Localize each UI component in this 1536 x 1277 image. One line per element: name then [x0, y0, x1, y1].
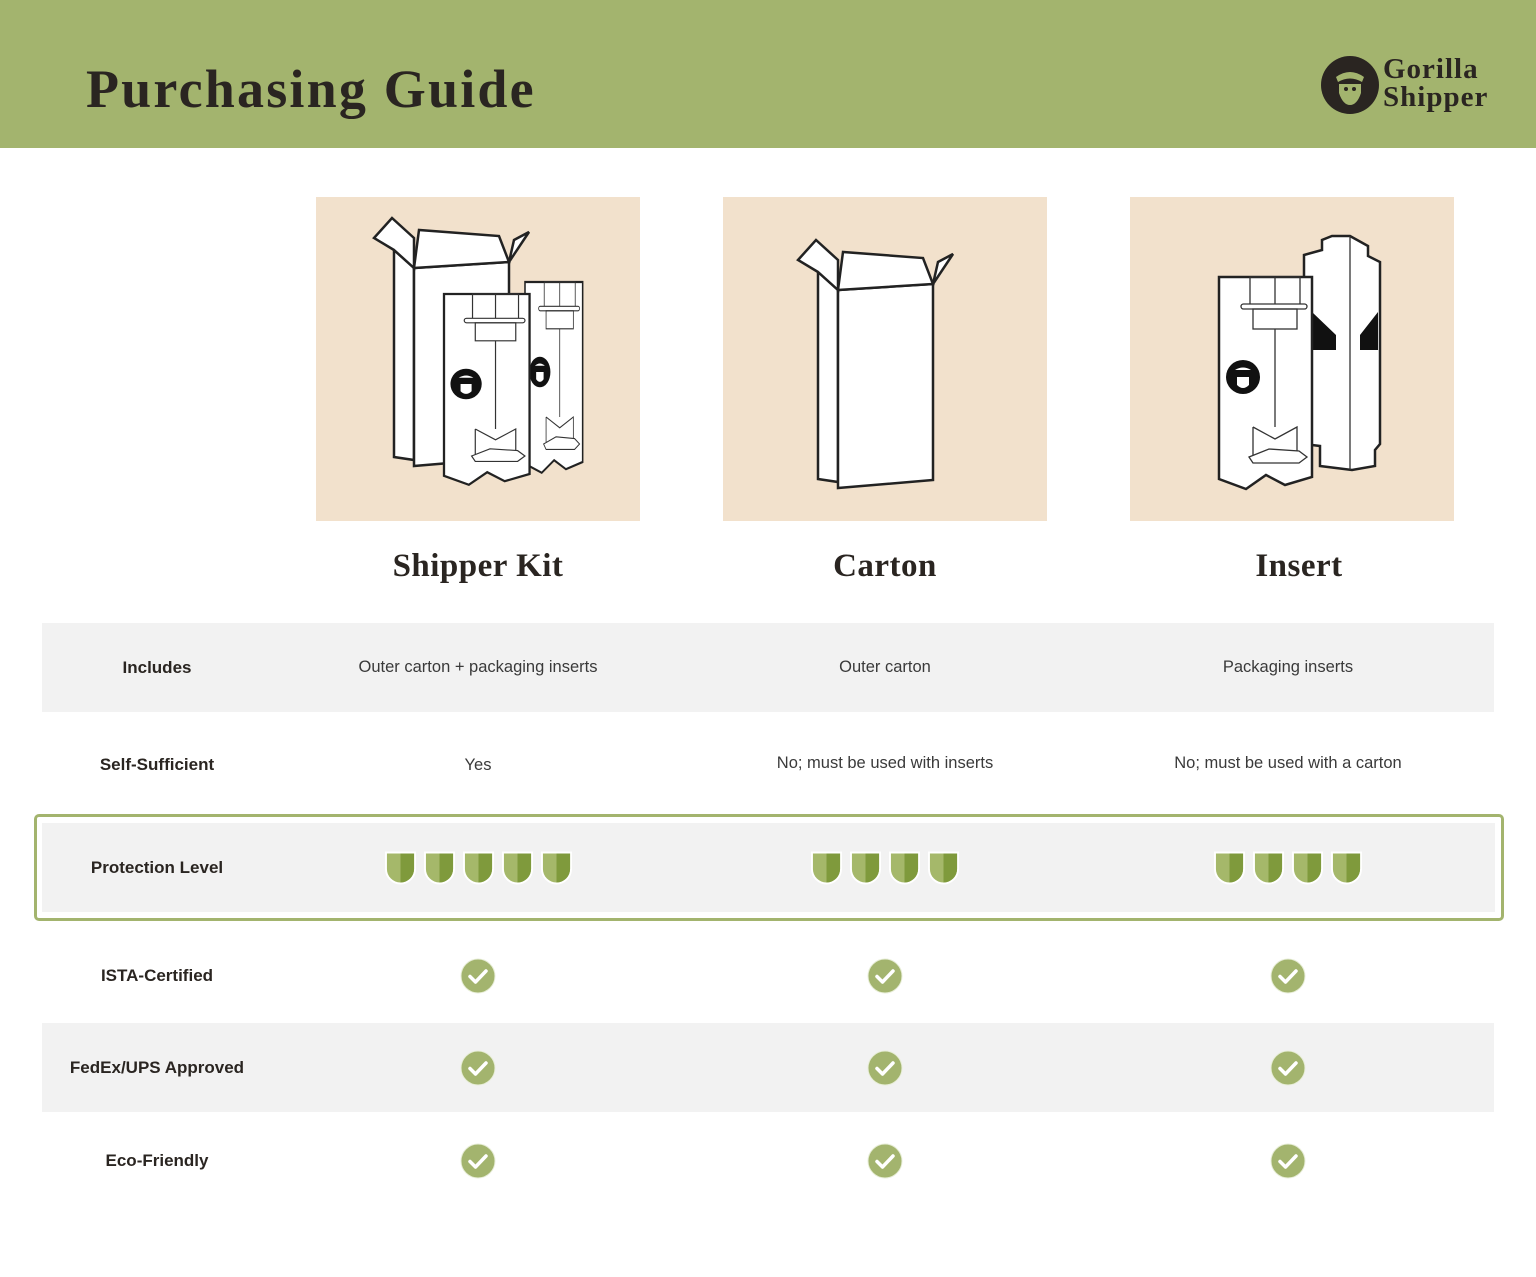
logo: Gorilla — [1383, 53, 1479, 85]
row: includes: Includes — [123, 658, 191, 676]
row: FedEx/UPS approved — [42, 1023, 1494, 1112]
title: Purchasing Guide — [86, 59, 536, 119]
panel: carton image — [723, 197, 1047, 521]
panel: insert image — [1130, 197, 1454, 521]
row: protection level (highlighted): Protection Level — [91, 858, 223, 876]
logo: Shipper — [1383, 81, 1488, 113]
row: self-sufficient: Yes — [465, 756, 491, 774]
panel: shipper kit image — [316, 197, 640, 521]
row: includes: Outer carton — [839, 658, 931, 676]
row: eco-friendly: Eco-Friendly — [106, 1151, 208, 1170]
shields: 5 — [385, 852, 572, 884]
row: ISTA-certified: ISTA-Certified — [101, 966, 213, 985]
row: protection level (highlighted) — [34, 814, 1504, 921]
heading: Insert: Insert — [1255, 548, 1343, 584]
row: self-sufficient: No; must be used with a carton — [1174, 754, 1402, 772]
shields: 4 — [1214, 852, 1362, 884]
heading: Carton: Carton — [833, 548, 937, 584]
row: FedEx/UPS approved: FedEx/UPS Approved — [70, 1058, 244, 1076]
row: ISTA-certified — [101, 958, 1306, 994]
shields: 4 — [811, 852, 959, 884]
row: includes: Packaging inserts — [1223, 658, 1353, 676]
row: self-sufficient: Self-Sufficient — [100, 755, 214, 774]
header bar — [0, 0, 1536, 148]
row: includes — [42, 623, 1494, 712]
row: self-sufficient — [100, 754, 1402, 774]
row: self-sufficient: No; must be used with inserts — [777, 754, 993, 772]
row: eco-friendly — [106, 1144, 1306, 1178]
heading: Shipper Kit: Shipper Kit — [393, 548, 563, 584]
logo — [1321, 53, 1488, 114]
row: includes: Outer carton + packaging inserts — [359, 658, 597, 676]
